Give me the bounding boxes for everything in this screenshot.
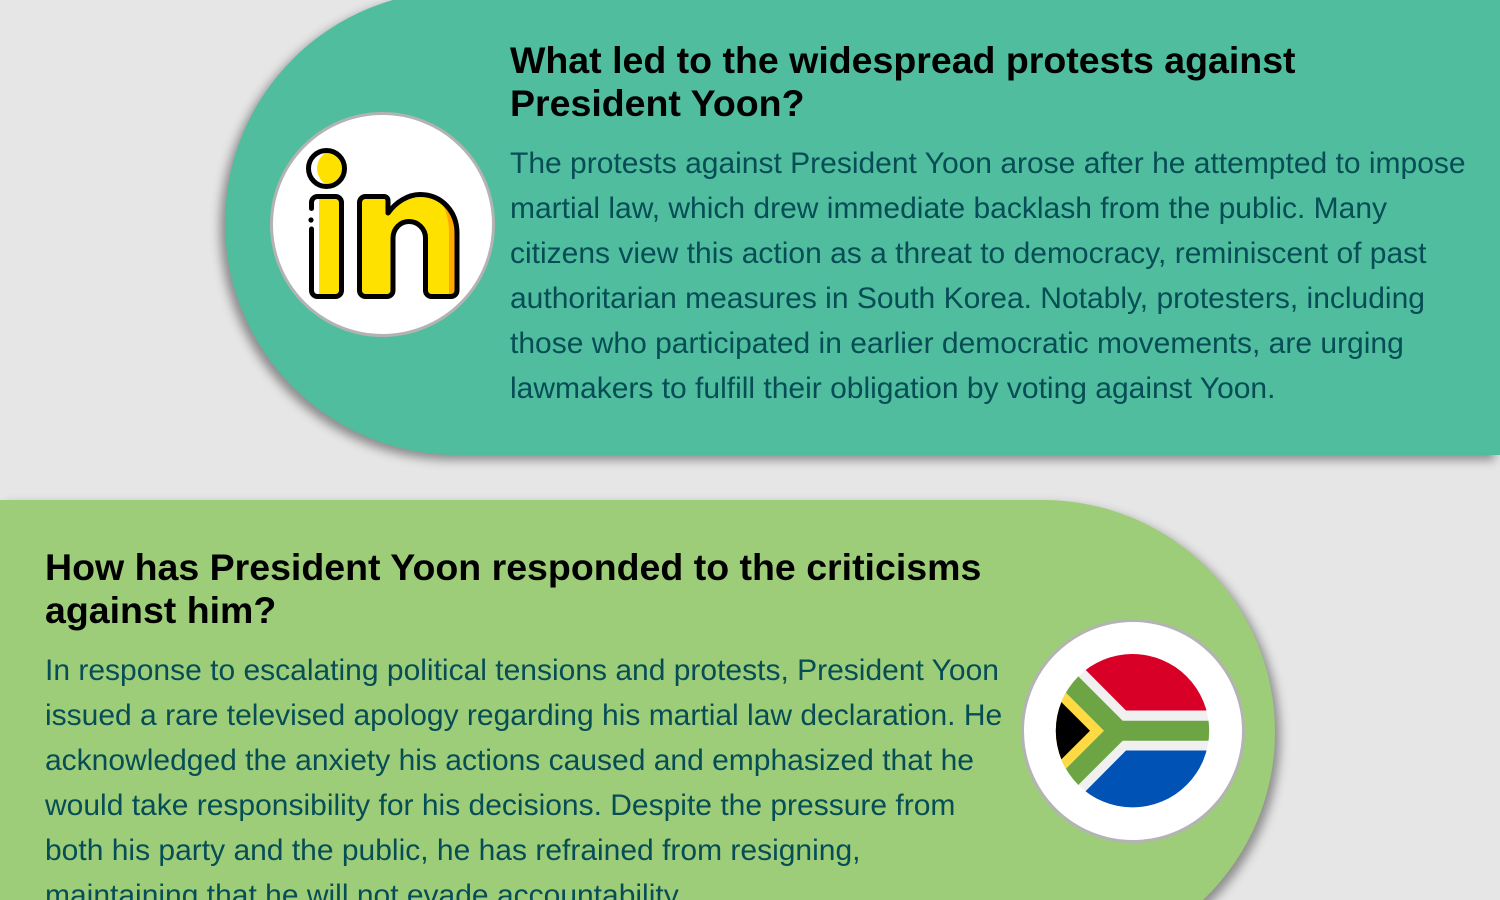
text block: response answer: would take responsibility for his decisions. Despite the pressure from [45,789,955,822]
text block: protests answer: citizens view this action as a threat to democracy, reminiscent of past [510,237,1427,270]
text block: protests answer: those who participated in earlier democratic movements, are urging [510,327,1404,360]
text block: response answer: both his party and the public, he has refrained from resigning, [45,834,860,867]
heading: protests question: President Yoon? [510,82,804,124]
text block: protests answer: lawmakers to fulfill their obligation by voting against Yoon. [510,372,1275,405]
text block: response answer: issued a rare televised apology regarding his martial law declaration. He [45,699,1002,732]
panel: response [0,500,1275,900]
text block: protests answer: authoritarian measures in South Korea. Notably, protesters, including [510,282,1425,315]
heading: response question [45,546,981,631]
icon: south africa flag [1021,619,1245,843]
icon: linkedin in [270,112,495,337]
text block: protests answer: martial law, which drew immediate backlash from the public. Many [510,192,1387,225]
text block: response answer: In response to escalating political tensions and protests, President Yoon [45,654,999,687]
panel: protests [225,0,1500,455]
heading: protests question: What led to the widespread protests against [510,39,1296,81]
heading: protests question [510,39,1296,124]
text block: protests answer: The protests against President Yoon arose after he attempted to impose [510,147,1466,180]
text block: response answer: acknowledged the anxiety his actions caused and emphasized that he [45,744,974,777]
text block: protests answer [510,147,1466,405]
text block: response answer [45,654,1002,900]
heading: response question: How has President Yoon responded to the criticisms [45,546,981,588]
heading: response question: against him? [45,589,276,631]
